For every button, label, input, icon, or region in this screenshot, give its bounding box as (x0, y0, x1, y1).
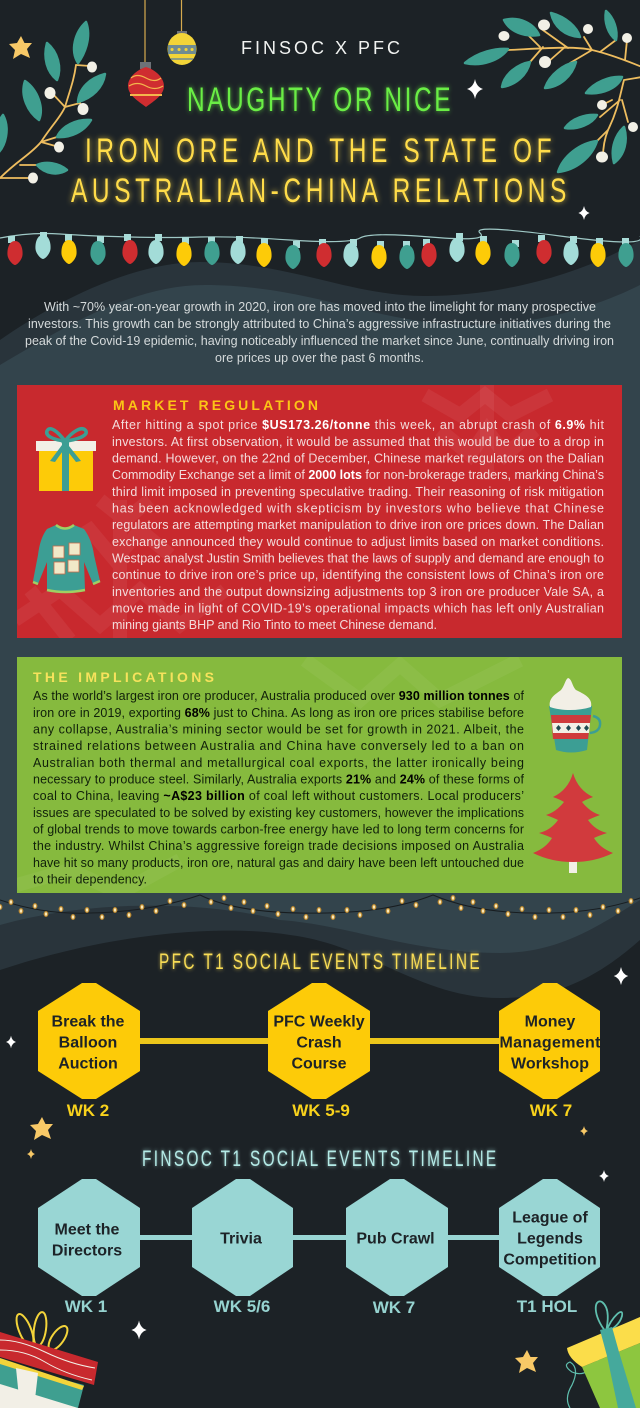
intro paragraph (25, 300, 614, 365)
icon: small sparkle (578, 206, 590, 220)
event: pfc weekly crash course: Course (291, 1056, 347, 1072)
icons: mid sparkles and star (6, 967, 628, 1159)
icon: gold star (9, 36, 32, 59)
body text: the implications: the industry. Whilst China’s aggressive foreign trade decisions imposed on Australia (33, 839, 524, 853)
title: naughty or nice: NAUGHTY OR NICE (187, 81, 451, 119)
body text: the implications: any collapse, Australia’s mining sector would be set for growth in 2021. Albeit, the (33, 722, 524, 736)
heading: pfc timeline: PFC T1 SOCIAL EVENTS TIMELINE (159, 950, 480, 975)
icon: sparkle (467, 79, 483, 99)
event: pfc weekly crash course (268, 983, 370, 1120)
icon: red bauble (128, 0, 164, 107)
icon: yellow bauble (168, 0, 196, 65)
header decoration: right branch (465, 11, 640, 172)
body text: market regulation: exchange announced they would continue to adjust limits based on market conditions. (112, 535, 604, 549)
string of christmas bulbs (0, 229, 640, 269)
event: money management workshop: WK 7 (530, 1101, 572, 1120)
intro paragraph: investors. This growth can be strongly attributed to China’s aggressive infrastructure initiatives during the (28, 317, 611, 331)
event: league of legends competition: Competition (503, 1252, 597, 1268)
timeline: pfc events (38, 983, 601, 1120)
event: trivia: Trivia (220, 1230, 262, 1248)
icon: gift box (36, 429, 96, 491)
icon: christmas tree (533, 773, 613, 873)
event: break the balloon auction: Balloon (59, 1034, 117, 1052)
timeline: finsoc events (38, 1179, 600, 1317)
body text: the implications: to their dependency. (33, 872, 147, 886)
event: pfc weekly crash course: Crash (296, 1034, 342, 1052)
event: league of legends competition: League of (512, 1210, 588, 1226)
body text: market regulation: third limit imposed in preventing speculative trading. Their reasoning of risk mitigation (112, 485, 604, 499)
event: meet the directors (38, 1179, 140, 1316)
body text: the implications: have hit so many products, iron ore, natural gas and dairy have been left untouched due (33, 856, 524, 870)
body text: market regulation: regulators are attempting market manipulation to drive iron ore prices down. The Dalian (112, 518, 604, 532)
body text: market regulation: move made in light of COVID-19’s operational impacts which has left only Australian (112, 602, 604, 616)
body text: the implications: coal to China, leaving ~A$23 billion of coal left without customers. Local producers’ (33, 789, 524, 803)
body text: the implications: issues are speculated to be solved by existing key customers, however the implications (33, 806, 524, 820)
event: trivia (192, 1179, 293, 1316)
event: pub crawl: Pub Crawl (356, 1230, 435, 1248)
icon: hot drink mug (549, 678, 600, 752)
body text: the implications: strained relations between Australia and China have conversely led to a ban on (33, 739, 524, 753)
heading: finsoc timeline: FINSOC T1 SOCIAL EVENTS TIMELINE (142, 1147, 496, 1172)
event: league of legends competition (499, 1179, 600, 1316)
event: money management workshop: Workshop (511, 1056, 589, 1072)
body text: market regulation: mining giants BHP and Rio Tinto to meet Chinese demand. (112, 618, 437, 632)
event: break the balloon auction: Auction (58, 1056, 118, 1072)
header decoration: left branch (0, 22, 105, 184)
body text: market regulation (112, 418, 605, 632)
icon: red gift bottom left (0, 1311, 98, 1408)
icons: lower sparkles and star (131, 1170, 609, 1373)
body text: the implications: necessary to produce steel. Similarly, Australia exports 21% and 24% of these forms of (33, 772, 525, 786)
body text: market regulation: Westpac analyst Justin Smith believes that the laws of supply and demand are enough to (112, 552, 604, 566)
event: money management workshop: Money (525, 1014, 575, 1030)
panel: the implications (17, 657, 622, 893)
title: subtitle (71, 132, 566, 210)
panel: market regulation (15, 385, 622, 640)
heading: the implications: THE IMPLICATIONS (33, 669, 214, 685)
icon: christmas sweater (33, 525, 100, 592)
event: pfc weekly crash course: WK 5-9 (292, 1101, 350, 1120)
body text: market regulation: continue to drive iron ore’s price up, identifying the consistent lows of China’s iron ore (112, 568, 604, 582)
event: trivia: WK 5/6 (214, 1297, 270, 1316)
event: league of legends competition: T1 HOL (517, 1297, 577, 1316)
event: meet the directors: Meet the (55, 1222, 120, 1238)
title: subtitle: AUSTRALIAN-CHINA RELATIONS (71, 172, 566, 210)
event: break the balloon auction: WK 2 (67, 1101, 109, 1120)
body text: market regulation: After hitting a spot price $US173.26/tonne this week, an abrupt crash of 6.9% hit (112, 418, 605, 432)
body text: the implications: iron ore in 2019, exporting 68% just to China. As long as iron ore prices stabilise before (33, 706, 524, 720)
intro paragraph: With ~70% year-on-year growth in 2020, iron ore has moved into the limelight for many prospective (44, 300, 596, 314)
body text: the implications: As the world’s largest iron ore producer, Australia produced over 930 million tonnes of (33, 689, 525, 703)
body text: market regulation: has been acknowledged with skepticism by investors who believe that Chinese (112, 502, 604, 516)
event: money management workshop (499, 983, 601, 1120)
intro paragraph: ore prices up over the past 6 months. (215, 351, 424, 365)
event: meet the directors: Directors (52, 1242, 122, 1260)
body text: market regulation: inventories and the output downsizing adjustments top 3 iron ore producer Vale SA, a (112, 585, 604, 599)
event: pfc weekly crash course: PFC Weekly (273, 1014, 365, 1030)
header label: FINSOC X PFC (241, 38, 400, 58)
body text: the implications (33, 689, 525, 886)
title: subtitle: IRON ORE AND THE STATE OF (85, 132, 552, 170)
event: money management workshop: Management (500, 1034, 601, 1052)
body text: market regulation: Commodity Exchange set a limit of 2000 lots for non-brokerage traders, marking China’s (112, 468, 604, 482)
event: meet the directors: WK 1 (65, 1297, 107, 1316)
heading: market regulation: MARKET REGULATION (113, 397, 318, 413)
fairy lights (0, 895, 640, 919)
body text: the implications: of global trends to move towards carbon-free energy have led to long term concerns for (33, 822, 524, 836)
event: break the balloon auction: Break the (52, 1014, 125, 1030)
event: pub crawl: WK 7 (373, 1298, 415, 1317)
event: break the balloon auction (38, 983, 140, 1120)
body text: the implications: Australian both thermal and metallurgical coal exports, the latter ironically being (33, 756, 524, 770)
icon: green gift bottom right (566, 1301, 640, 1408)
event: league of legends competition: Legends (517, 1230, 583, 1248)
intro paragraph: peak of the Covid-19 epidemic, having noticeably influenced the market since June, continually driving iron (25, 334, 614, 348)
event: pub crawl (346, 1179, 448, 1317)
body text: market regulation: demand. However, on the 22nd of December, Chinese market regulators on the Dalian (112, 452, 604, 466)
body text: market regulation: investors. At first observation, it would be assumed that this would be due to a drop in (112, 435, 604, 449)
